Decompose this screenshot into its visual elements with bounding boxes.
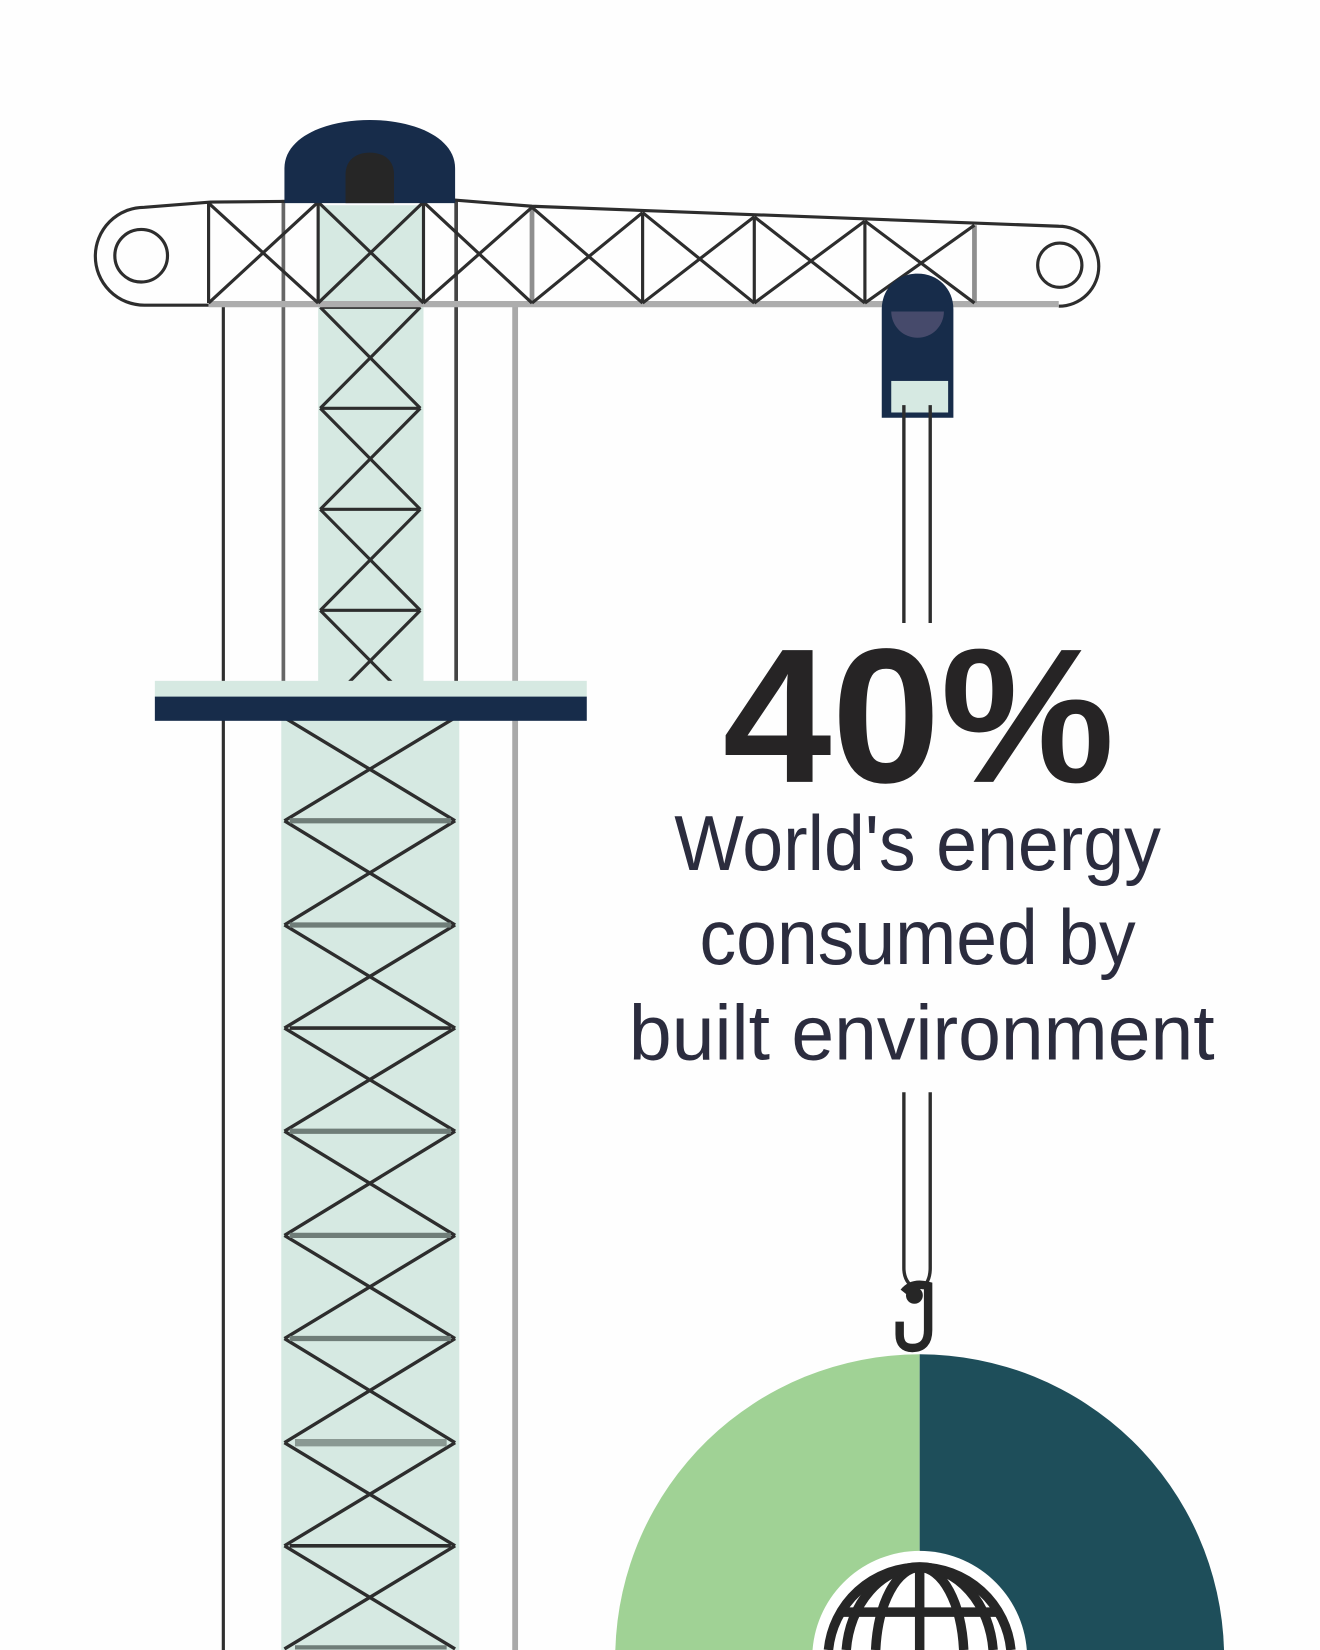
crane jib [95, 200, 1099, 306]
stat: 40%: 40% [723, 609, 1115, 823]
icon: globe [828, 1567, 1011, 1650]
upper tower lattice [320, 307, 420, 711]
icon: crane hook [900, 1285, 928, 1348]
lower tower lattice [284, 718, 455, 1649]
tower lower section background [281, 716, 459, 1650]
donut chart: half and half [615, 1354, 1224, 1650]
crane cab [284, 120, 455, 203]
trolley [882, 274, 953, 418]
tower upper section background [318, 205, 423, 684]
caption line 3: built environment [629, 989, 1215, 1077]
caption line 1: World's energy [674, 799, 1161, 887]
platform [155, 681, 587, 721]
caption line 2: consumed by [700, 893, 1136, 981]
hoist cables lower [904, 1092, 930, 1288]
support cables and tower rails [223, 200, 515, 1650]
hoist cables upper [904, 405, 930, 623]
